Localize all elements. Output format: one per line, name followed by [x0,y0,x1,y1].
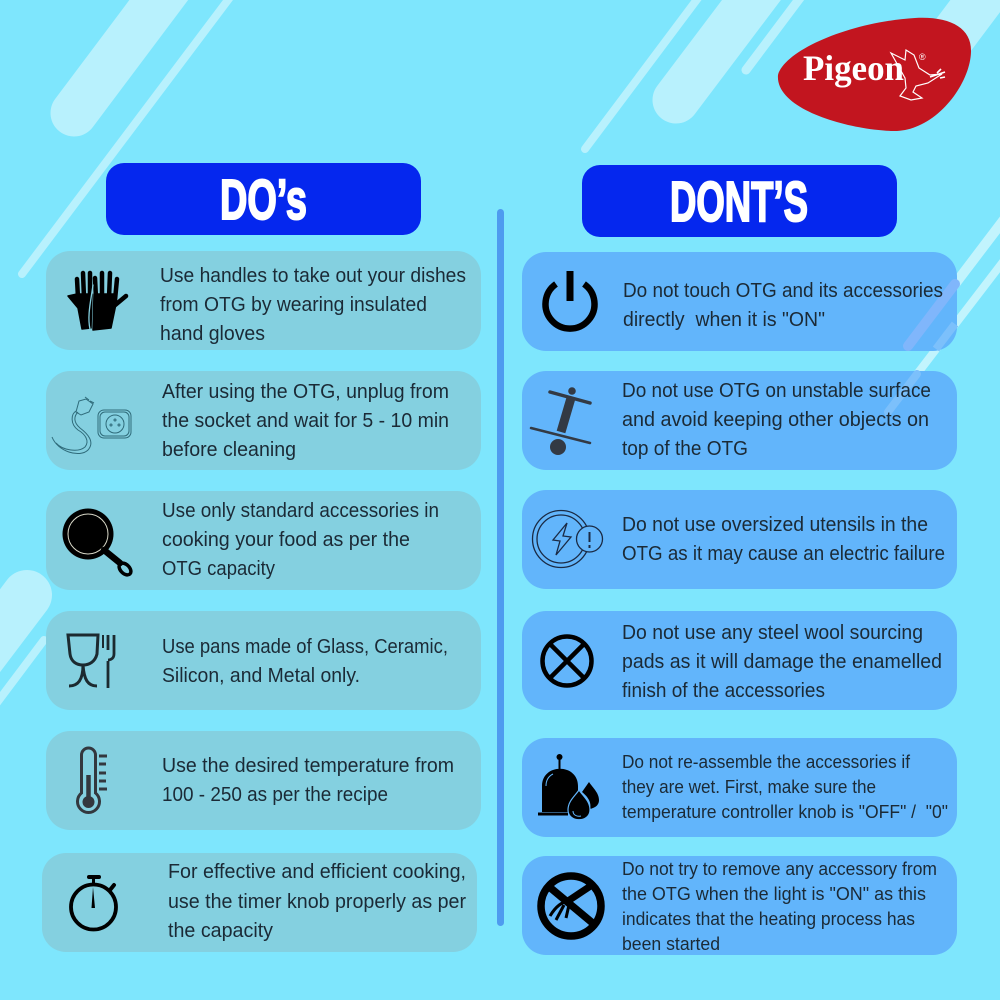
panel: oversized utensils: OTG as it may cause an electric failure [622,542,945,565]
logo: Pigeon: ® [919,52,926,62]
panel: re-assemble [522,738,957,837]
panel: do not touch [522,252,957,351]
panel: pans: Use pans made of Glass, Ceramic, [162,635,448,658]
panel: remove accessory: indicates that the heating process has [622,909,915,929]
panel: steel wool [522,611,957,710]
heading: DO's [106,163,421,235]
panel: temperature [46,731,481,830]
icon: cloche and drops [538,754,599,820]
icon: frying pan [62,508,133,577]
panel: remove accessory: been started [622,934,720,954]
panel: remove accessory: the OTG when the light is "ON" as this [622,884,926,904]
panel: steel wool: finish of the accessories [622,679,825,702]
panel: pans [46,611,481,710]
divider [497,209,504,926]
heading: DONT'S: DONT’S [670,170,808,234]
panel: gloves: Use handles to take out your dishes [160,264,466,287]
panel: unstable surface: and avoid keeping other objects on [622,408,929,431]
icon: no hand [541,876,601,936]
panel: unplug: before cleaning [162,438,296,461]
icon: stopwatch [71,877,116,930]
panel: gloves [46,251,481,350]
logo: Pigeon [778,18,971,131]
icon: balance [531,387,590,455]
heading: DO's: DO’s [220,168,307,232]
panel: re-assemble: they are wet. First, make sure the [622,777,876,797]
panel: gloves: hand gloves [160,322,265,345]
panel: steel wool: Do not use any steel wool sourcing [622,621,923,644]
panel: temperature: Use the desired temperature from [162,754,454,777]
icon: plug and socket [52,397,131,454]
panel: temperature: 100 - 250 as per the recipe [162,783,388,806]
panel: accessories: OTG capacity [162,557,276,580]
panel: gloves: from OTG by wearing insulated [160,293,427,316]
panel: timer: For effective and efficient cooking, [168,860,466,883]
panel: accessories: Use only standard accessories in [162,499,439,522]
panel: pans: Silicon, and Metal only. [162,664,360,687]
panel: do not touch: Do not touch OTG and its accessories [623,279,943,302]
panel: accessories: cooking your food as per the [162,528,410,551]
icon: power [545,271,594,329]
panel: timer: the capacity [168,919,274,942]
icon: crossed circle [542,636,592,686]
logo: Pigeon: Pigeon [803,48,904,88]
panel: unstable surface: top of the OTG [622,437,748,460]
icon: glass and fork [68,635,114,688]
icon: electric warning [532,510,602,568]
panel: accessories [46,491,481,590]
panel: unplug: the socket and wait for 5 - 10 min [162,409,449,432]
icon: gloves [68,273,126,330]
panel: unplug: After using the OTG, unplug from [162,380,449,403]
panel: timer [42,853,477,952]
panel: re-assemble: temperature controller knob is "OFF" / "0" [622,802,948,822]
panel: unplug [46,371,481,470]
panel: steel wool: pads as it will damage the enamelled [622,650,942,673]
panel: do not touch: directly when it is "ON" [623,308,825,331]
panel: remove accessory [522,856,957,955]
panel: remove accessory: Do not try to remove any accessory from [622,859,937,879]
panel: timer: use the timer knob properly as per [168,890,466,913]
panel: re-assemble: Do not re-assemble the accessories if [622,752,911,772]
panel: unstable surface: Do not use OTG on unstable surface [622,379,931,402]
panel: unstable surface [522,371,957,470]
icon: thermometer [77,748,107,812]
heading: DONT'S [582,165,897,237]
panel: oversized utensils: Do not use oversized utensils in the [622,513,928,536]
panel: oversized utensils [522,490,957,589]
